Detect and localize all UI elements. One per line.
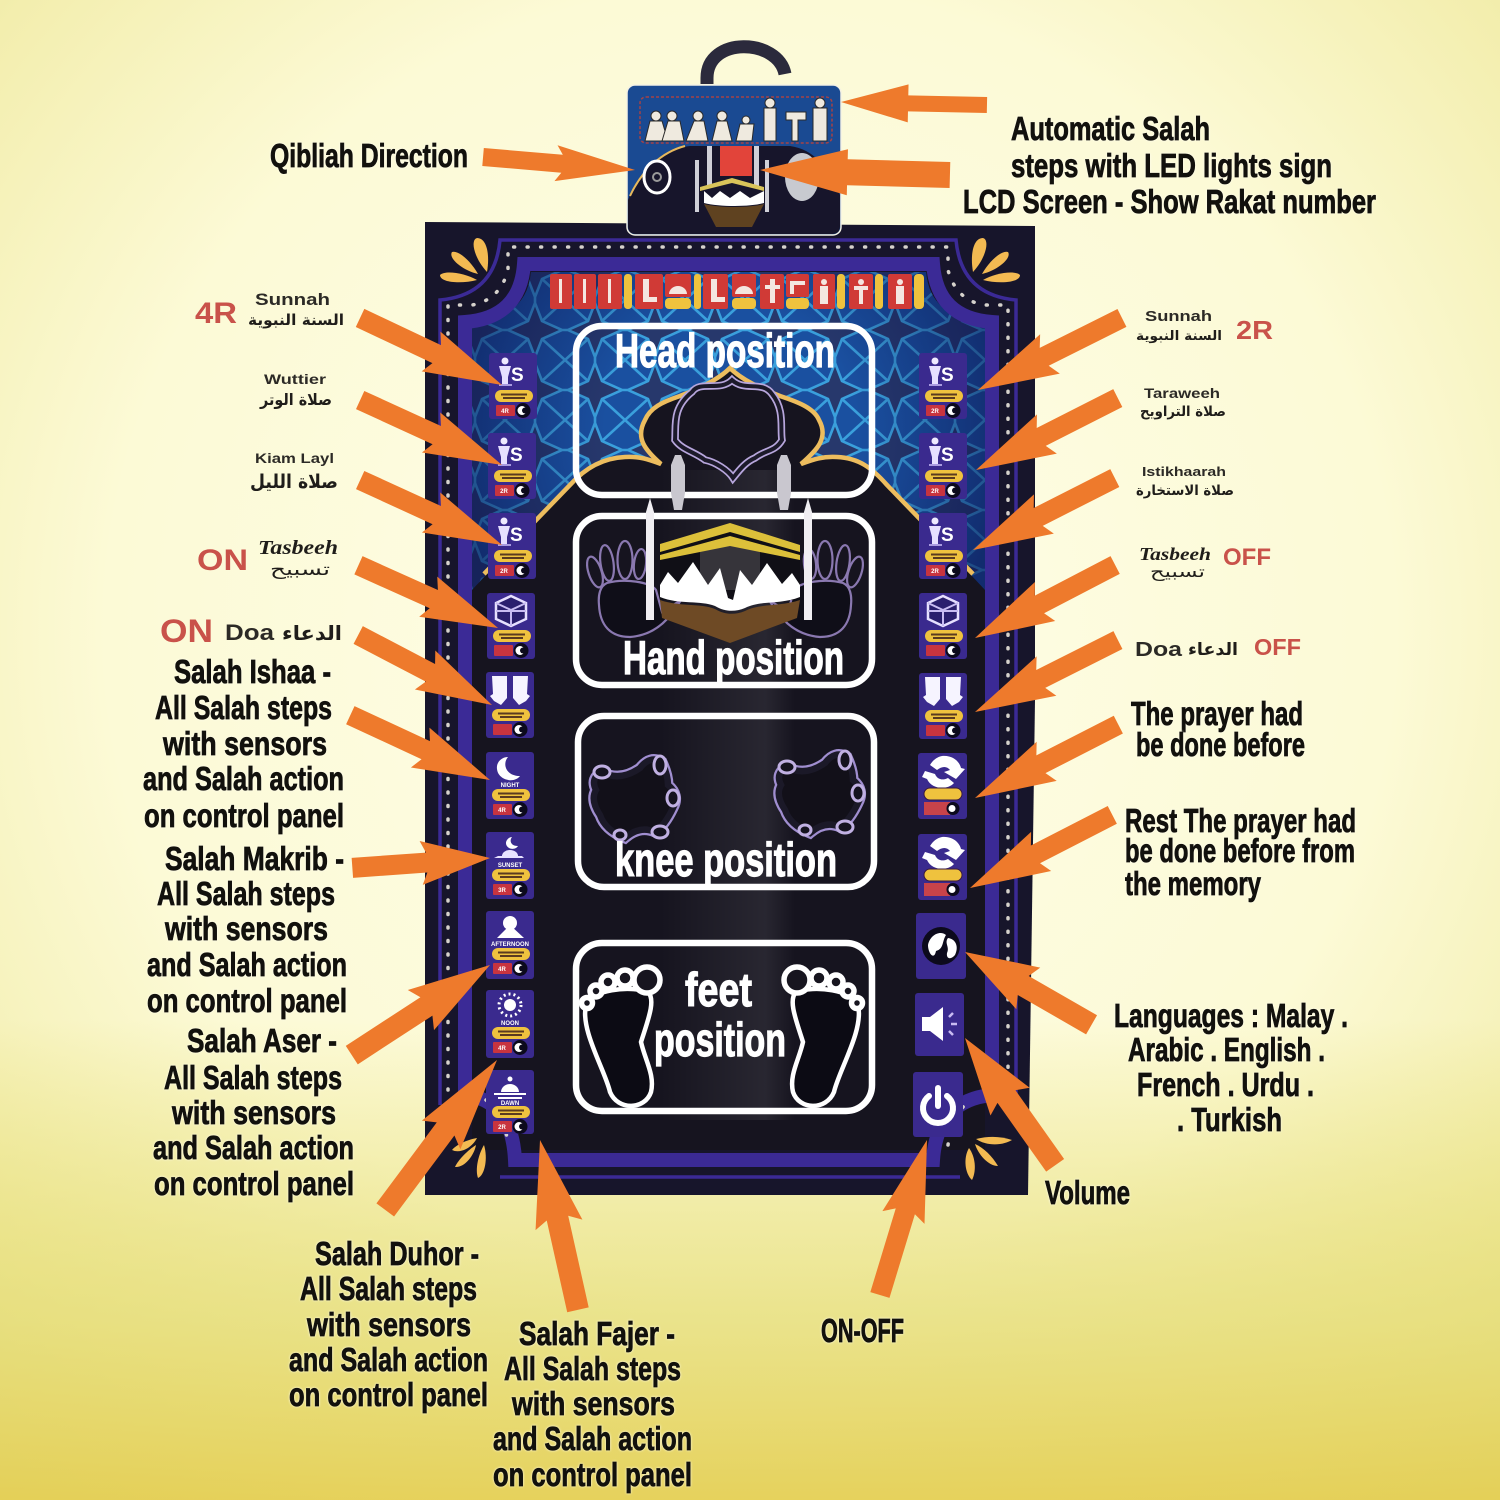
- mosque gold outline: [484, 368, 973, 574]
- arrow: fajer: [517, 1135, 601, 1315]
- arrow: tasbeeh off: [965, 546, 1125, 658]
- label: languages: Languages : Malay .: [1114, 997, 1348, 1034]
- arrow: wuttier: [351, 380, 511, 485]
- label: sunnah 2R: [1136, 308, 1273, 345]
- label: kiam layl: [250, 450, 338, 493]
- heading: feet: [685, 963, 752, 1016]
- label: salah makrib: [147, 840, 347, 1019]
- label: doa off: [1135, 634, 1301, 661]
- label: salah ishaa: All Salah steps: [155, 689, 332, 726]
- label: salah aser: Salah Aser -: [187, 1022, 337, 1059]
- button: wuttier: 2R: [500, 489, 509, 495]
- mat base: [425, 222, 1035, 1195]
- button: night: [486, 752, 534, 819]
- label: salah ishaa: on control panel: [144, 797, 344, 834]
- label: rest from memory: be done before from: [1125, 832, 1355, 869]
- label: salah aser: on control panel: [154, 1165, 354, 1202]
- label: salah makrib: All Salah steps: [157, 875, 335, 912]
- button: afternoon: AFTERNOON: [491, 942, 529, 948]
- corner leaves bottom right: [965, 1137, 1012, 1180]
- arrow: taraweeh: [966, 378, 1128, 490]
- arrow: volume: [945, 1024, 1075, 1179]
- label: on doa: ON: [160, 613, 213, 649]
- label: istikhaarah: [1136, 464, 1234, 499]
- heading: position: [654, 1013, 786, 1066]
- head position panel: [576, 324, 872, 495]
- label: salah duhor: and Salah action: [289, 1341, 488, 1378]
- label: rest from memory: [1125, 802, 1356, 902]
- button: noon: [486, 990, 534, 1058]
- label: salah ishaa: and Salah action: [143, 760, 344, 797]
- label: salah duhor: Salah Duhor -: [315, 1235, 479, 1272]
- label: salah ishaa: [143, 653, 344, 834]
- label: qibliah direction: Qibliah Direction: [270, 137, 468, 174]
- dome gold edge: [630, 146, 685, 196]
- label: on doa: Doa: [225, 620, 275, 645]
- label: salah aser: and Salah action: [153, 1129, 354, 1166]
- label: salah fajer: and Salah action: [493, 1420, 692, 1457]
- arrows: [339, 83, 1132, 1315]
- button: volume: [915, 993, 964, 1056]
- button: night: NIGHT: [501, 783, 520, 789]
- label: sunnah 2R: السنة النبوية: [1136, 329, 1222, 344]
- label: salah duhor: on control panel: [289, 1376, 488, 1413]
- arrow: ishaa: [341, 695, 499, 800]
- panel dark dome: [628, 146, 840, 234]
- button: sunnah 2R: S: [941, 365, 954, 386]
- label: salah makrib: and Salah action: [147, 946, 347, 983]
- arrow: qibla: [482, 139, 637, 188]
- label: taraweeh: [1140, 385, 1226, 420]
- button: languages: [916, 913, 966, 979]
- label: kiam layl: صلاة الليل: [250, 471, 338, 493]
- label: tasbeeh off: OFF: [1223, 544, 1271, 571]
- label: salah fajer: [493, 1315, 692, 1493]
- label: on doa: [160, 613, 342, 649]
- arrow: lcd screen: [759, 147, 951, 198]
- button: sunnah 4R: 4R: [501, 409, 510, 415]
- button: afternoon: [486, 911, 534, 979]
- red step indicator strip: [550, 274, 924, 309]
- label: salah duhor: [289, 1235, 488, 1413]
- label: prayer done before: be done before: [1136, 726, 1305, 763]
- label: salah duhor: with sensors: [306, 1306, 471, 1343]
- label: salah fajer: with sensors: [511, 1385, 675, 1422]
- button: memory 1: [918, 753, 967, 819]
- control panel: [627, 85, 841, 235]
- speaker disc: [785, 153, 819, 201]
- heading: Head position: [615, 324, 835, 377]
- arrow: duhor: [366, 1046, 516, 1224]
- label: on doa: الدعاء: [282, 621, 342, 645]
- label: tasbeeh off: تسبيح: [1150, 562, 1205, 582]
- right buttons: [913, 353, 967, 1137]
- lattice edge shading: [472, 272, 985, 600]
- arrow: istikhaarah: [963, 458, 1125, 570]
- label: istikhaarah: Istikhaarah: [1142, 464, 1226, 479]
- label: on tasbeeh: تسبيح: [270, 560, 330, 580]
- left hand outline: [584, 541, 681, 637]
- corner leaves bottom left: [452, 1138, 486, 1178]
- button: sunnah 2R: [919, 353, 967, 419]
- label: rest from memory: Rest The prayer had: [1125, 802, 1356, 839]
- button: doa off: [919, 673, 967, 739]
- label: salah ishaa: Salah Ishaa -: [174, 653, 331, 690]
- button: taraweeh: 2R: [931, 489, 940, 495]
- arrow: rest memory: [960, 795, 1122, 908]
- label: salah makrib: Salah Makrib -: [165, 840, 344, 877]
- label: salah aser: with sensors: [171, 1094, 336, 1131]
- label: on-off: ON-OFF: [821, 1312, 904, 1349]
- label: 4R sunnah: Sunnah: [255, 290, 330, 309]
- mini kaaba: [700, 178, 764, 227]
- button: kiam layl: [488, 513, 536, 579]
- button: dawn: 2R: [498, 1125, 507, 1131]
- step strip frame: [640, 97, 832, 143]
- heading: knee position: [615, 833, 837, 886]
- label: tasbeeh off: Tasbeeh: [1139, 544, 1211, 564]
- label: prayer done before: [1131, 695, 1305, 763]
- heading: Hand position: [623, 631, 844, 684]
- arrow: sunnah right: [968, 298, 1132, 410]
- button: istikhaarah: [919, 513, 967, 579]
- label: automatic salah steps and lcd: steps with LED lights sign: [1011, 147, 1332, 184]
- feet position panel: [576, 943, 872, 1111]
- button: taraweeh: [919, 433, 967, 499]
- label: languages: Arabic . English .: [1128, 1031, 1325, 1068]
- label: salah duhor: All Salah steps: [300, 1270, 477, 1307]
- label: automatic salah steps and lcd: LCD Screen - Show Rakat number: [963, 183, 1376, 220]
- label: doa off: الدعاء: [1188, 640, 1238, 660]
- cloth sheen: [660, 470, 795, 1120]
- label: taraweeh: Taraweeh: [1144, 385, 1220, 401]
- seven prayer figures: [645, 98, 827, 141]
- button: tasbeeh on: [487, 593, 535, 659]
- hanger hook: [707, 47, 785, 84]
- label: salah makrib: on control panel: [147, 982, 347, 1019]
- button: noon: NOON: [501, 1021, 519, 1027]
- hand position panel: [576, 455, 872, 685]
- arrow: doa on: [348, 616, 502, 724]
- label: automatic salah steps and lcd: [963, 110, 1376, 220]
- qibla sensor: [644, 161, 670, 193]
- button: tasbeeh off: [919, 593, 967, 659]
- mini minarets: [695, 146, 769, 212]
- button: taraweeh: S: [941, 445, 954, 466]
- button: sunnah 4R: S: [511, 365, 524, 386]
- button: dawn: DAWN: [501, 1101, 519, 1107]
- label: on tasbeeh: Tasbeeh: [258, 537, 338, 559]
- label: salah fajer: on control panel: [493, 1456, 692, 1493]
- arrow: makrib: [351, 836, 492, 890]
- label: sunnah 2R: Sunnah: [1145, 308, 1212, 325]
- label: wuttier: صلاة الوتر: [259, 390, 332, 409]
- arrow: prayer before: [965, 705, 1128, 818]
- outer border: [440, 240, 1016, 1177]
- kaaba: [660, 523, 800, 643]
- button: afternoon: 4R: [498, 967, 507, 973]
- button: noon: 4R: [498, 1046, 507, 1052]
- label: automatic salah steps and lcd: Automatic Salah: [1011, 110, 1210, 147]
- arrow: sunnah left: [351, 298, 511, 405]
- button: kiam layl: 2R: [500, 569, 509, 575]
- button: sunset: 3R: [498, 888, 507, 894]
- label: on tasbeeh: [197, 537, 338, 580]
- label: languages: . Turkish: [1177, 1101, 1282, 1138]
- label: on tasbeeh: ON: [197, 544, 248, 577]
- right hand outline: [769, 541, 866, 637]
- button: night: 4R: [498, 808, 507, 814]
- mosque dark fill: [472, 368, 985, 1150]
- label: istikhaarah: صلاة الاستخارة: [1136, 483, 1234, 499]
- LCD screen: [720, 146, 752, 176]
- label: doa off: Doa: [1135, 639, 1183, 661]
- button: kiam layl: S: [510, 525, 523, 546]
- button: memory 2: [918, 834, 967, 900]
- label: 4R sunnah: السنة النبوية: [248, 311, 344, 329]
- arrow: kiam layl: [351, 460, 511, 565]
- label: volume: Volume: [1045, 1174, 1130, 1211]
- label: salah aser: All Salah steps: [164, 1059, 342, 1096]
- label: 4R sunnah: [195, 290, 344, 330]
- label: salah aser: [153, 1022, 354, 1202]
- button: istikhaarah: S: [941, 525, 954, 546]
- label: kiam layl: Kiam Layl: [255, 450, 334, 466]
- button: istikhaarah: 2R: [931, 569, 940, 575]
- label: salah makrib: with sensors: [164, 910, 328, 947]
- arrow: on-off: [859, 1134, 948, 1301]
- label: wuttier: [259, 371, 332, 409]
- label: languages: [1114, 997, 1348, 1138]
- label: salah fajer: All Salah steps: [504, 1350, 681, 1387]
- left knee outline: [594, 756, 679, 840]
- button: wuttier: S: [510, 445, 523, 466]
- label: taraweeh: صلاة التراويح: [1140, 404, 1226, 420]
- label: rest from memory: the memory: [1125, 865, 1261, 902]
- arrow: aser: [339, 945, 503, 1075]
- blue lattice field: [472, 272, 985, 600]
- minarets: [646, 455, 812, 620]
- button: wuttier: [488, 433, 536, 499]
- label: doa off: OFF: [1254, 634, 1301, 660]
- label: 4R sunnah: 4R: [195, 297, 237, 330]
- label: sunnah 2R: 2R: [1236, 315, 1273, 345]
- label: salah ishaa: with sensors: [162, 725, 327, 762]
- arrow: languages: [953, 931, 1104, 1046]
- button: sunnah 2R: 2R: [931, 409, 940, 415]
- button: power: [913, 1072, 963, 1137]
- right foot: [784, 967, 862, 1106]
- corner leaves top right: [972, 238, 1020, 282]
- label: languages: French . Urdu .: [1137, 1066, 1314, 1103]
- right knee outline: [779, 751, 864, 835]
- button: doa on: [486, 672, 534, 738]
- button: sunnah 4R: [489, 353, 537, 419]
- label: wuttier: Wuttier: [264, 371, 327, 387]
- label: salah fajer: Salah Fajer -: [519, 1315, 675, 1352]
- left buttons: [486, 353, 537, 1134]
- left foot: [582, 967, 660, 1106]
- arrow: doa off: [965, 620, 1128, 732]
- panel body: [627, 85, 841, 235]
- button: sunset: [486, 832, 534, 899]
- arrow: automatic steps: [841, 83, 987, 124]
- prayer mat: [425, 222, 1035, 1195]
- button: dawn: [486, 1070, 534, 1134]
- label: prayer done before: The prayer had: [1131, 695, 1303, 732]
- knee position panel: [578, 716, 874, 887]
- label: tasbeeh off: [1139, 544, 1271, 582]
- button: sunset: SUNSET: [498, 863, 522, 869]
- head outline: [675, 380, 782, 478]
- arrow: tasbeeh on: [349, 545, 507, 648]
- corner leaves top left: [440, 238, 488, 282]
